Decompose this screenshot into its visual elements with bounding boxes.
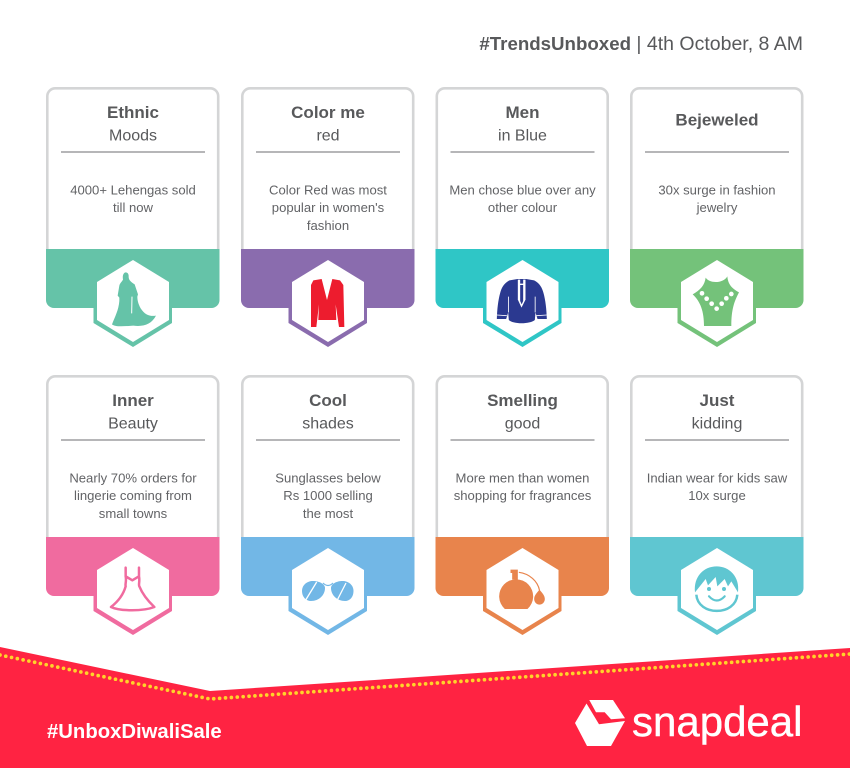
description: lingerie coming from bbox=[74, 488, 192, 503]
panel: Just kidding bbox=[630, 376, 804, 635]
icon: lehenga bbox=[112, 272, 156, 326]
description: other colour bbox=[488, 200, 558, 215]
panel: Inner Beauty bbox=[46, 376, 220, 635]
decorative lights bbox=[0, 654, 850, 699]
description: the most bbox=[303, 506, 353, 521]
description: fashion bbox=[307, 218, 349, 233]
description: popular in women's bbox=[272, 200, 385, 215]
description: Rs 1000 selling bbox=[283, 488, 373, 503]
colour band bbox=[241, 537, 414, 596]
description: Indian wear for kids saw bbox=[647, 470, 788, 486]
description: small towns bbox=[99, 506, 168, 521]
panel: Bejeweled bbox=[630, 88, 804, 347]
subheading: Moods bbox=[109, 128, 157, 145]
description: Men chose blue over any bbox=[449, 182, 596, 198]
hexagon badge bbox=[288, 548, 367, 635]
heading: Cool bbox=[309, 391, 347, 410]
colour band bbox=[436, 537, 609, 596]
footer banner bbox=[0, 647, 850, 768]
icon: smiling kid bbox=[695, 566, 738, 611]
heading: Smelling bbox=[487, 391, 558, 410]
hexagon badge bbox=[94, 548, 172, 635]
heading: Ethnic bbox=[107, 103, 159, 122]
description: Sunglasses below bbox=[275, 470, 381, 486]
panel: Smelling good bbox=[436, 376, 609, 635]
hexagon badge bbox=[678, 548, 756, 635]
heading: Inner bbox=[112, 391, 154, 410]
heading: Color me bbox=[291, 103, 365, 122]
hexagon badge bbox=[483, 260, 562, 347]
wordmark: snapdeal bbox=[632, 698, 802, 745]
description: 4000+ Lehengas sold bbox=[70, 182, 196, 198]
colour band bbox=[630, 537, 804, 596]
subheading: good bbox=[505, 416, 540, 433]
description: More men than women bbox=[456, 470, 589, 486]
colour band bbox=[46, 537, 220, 596]
panel: Color me red bbox=[241, 88, 414, 347]
hexagon badge bbox=[678, 260, 756, 347]
hexagon badge bbox=[288, 260, 367, 347]
icon: red cardigan bbox=[311, 279, 344, 327]
heading: Just bbox=[700, 391, 735, 410]
subheading: red bbox=[316, 128, 340, 145]
colour band bbox=[436, 249, 609, 308]
subheading: shades bbox=[302, 416, 354, 433]
hexagon badge bbox=[483, 548, 562, 635]
subheading: in Blue bbox=[498, 128, 547, 145]
colour band bbox=[630, 249, 804, 308]
icon: perfume bottle bbox=[499, 570, 545, 609]
heading: Men bbox=[506, 103, 540, 122]
icon: necklace on bust bbox=[693, 276, 739, 326]
icon: sunglasses bbox=[302, 581, 354, 601]
heading: Bejeweled bbox=[675, 111, 759, 130]
hexagon badge bbox=[94, 260, 172, 347]
subheading: kidding bbox=[692, 416, 742, 433]
hashtag: #UnboxDiwaliSale bbox=[47, 721, 222, 743]
description: till now bbox=[113, 200, 154, 215]
icon: blue suit bbox=[497, 279, 547, 323]
panel: Cool shades bbox=[241, 376, 414, 635]
snapdeal logo bbox=[575, 698, 802, 746]
colour band bbox=[46, 249, 220, 308]
description: Nearly 70% orders for bbox=[69, 470, 197, 486]
header: event hashtag and date: #TrendsUnboxed | 4th October, 8 AM bbox=[479, 33, 803, 55]
description: jewelry bbox=[696, 200, 738, 215]
subheading: Beauty bbox=[108, 416, 158, 433]
description: shopping for fragrances bbox=[454, 488, 592, 503]
icon: snapdeal box bbox=[575, 700, 625, 746]
description: Color Red was most bbox=[269, 182, 387, 198]
panel: Men in Blue bbox=[436, 88, 609, 347]
icon: dress bbox=[111, 568, 154, 610]
panel: Ethnic Moods bbox=[46, 88, 220, 347]
description: 30x surge in fashion bbox=[658, 182, 776, 198]
colour band bbox=[241, 249, 414, 308]
description: 10x surge bbox=[688, 488, 746, 503]
